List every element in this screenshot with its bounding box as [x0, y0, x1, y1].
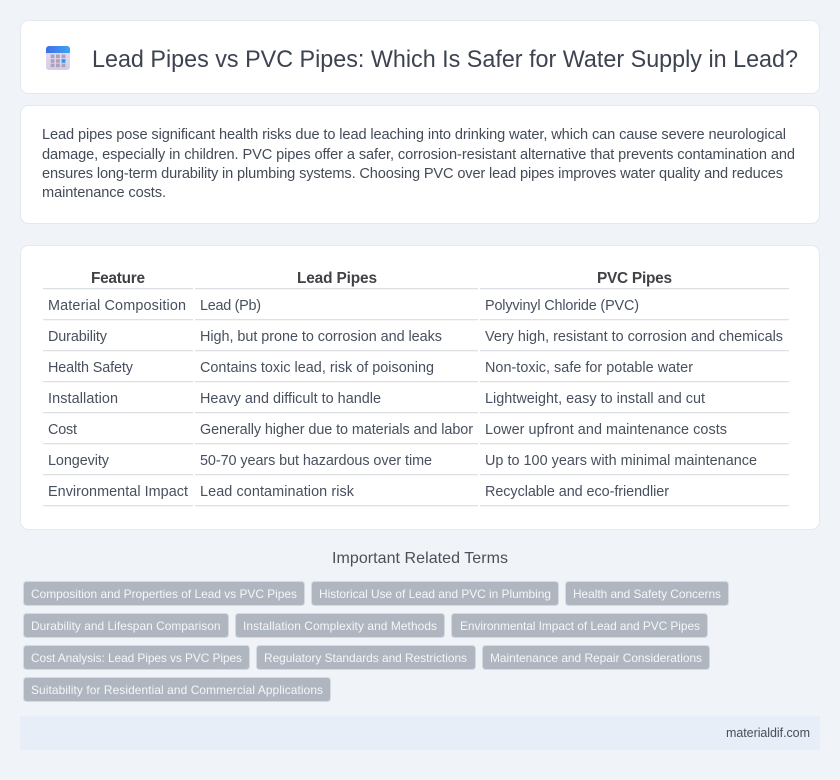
row: durability: Very high, resistant to corrosion and chemicals: [485, 329, 783, 345]
row: material composition: Lead (Pb): [200, 298, 261, 314]
tag: [24, 678, 330, 702]
row: cost: Lower upfront and maintenance costs: [485, 422, 727, 438]
row: cost: Generally higher due to materials and labor: [200, 422, 473, 438]
tag: Environmental Impact of Lead and PVC Pipes: [460, 619, 700, 633]
tag: Health and Safety Concerns: [573, 587, 721, 601]
tag: Regulatory Standards and Restrictions: [264, 651, 467, 665]
row: health safety: Non-toxic, safe for potable water: [485, 360, 693, 376]
header panel: [20, 20, 820, 94]
panel: introduction text: Lead pipes pose significant health risks due to lead leaching into drinking water, which can cause severe neurological: [42, 127, 786, 143]
tag: [312, 582, 558, 606]
row: material composition: [48, 298, 639, 314]
row: durability: Durability: [48, 329, 108, 345]
tag: Historical Use of Lead and PVC in Plumbing: [319, 587, 551, 601]
footer: [20, 716, 820, 750]
heading: important related terms: Important Related Terms: [332, 550, 508, 567]
tag: [452, 614, 708, 638]
tag: [482, 646, 710, 670]
tag: Maintenance and Repair Considerations: [490, 651, 702, 665]
row: health safety: Health Safety: [48, 360, 134, 376]
row: installation: [48, 391, 705, 407]
icon: calendar: [46, 46, 70, 70]
related terms tags: [24, 582, 728, 702]
tag: Installation Complexity and Methods: [243, 619, 437, 633]
table header: [91, 270, 672, 287]
row: health safety: [48, 360, 693, 376]
row: longevity: Up to 100 years with minimal maintenance: [485, 453, 757, 469]
tag: [24, 614, 228, 638]
tag: [24, 646, 250, 670]
tag: [566, 582, 728, 606]
row: material composition: Polyvinyl Chloride (PVC): [485, 298, 639, 314]
tag: [236, 614, 444, 638]
panel: introduction text: [20, 106, 820, 224]
row: longevity: Longevity: [48, 453, 110, 469]
row: longevity: [48, 453, 757, 469]
tag: Composition and Properties of Lead vs PVC Pipes: [31, 587, 297, 601]
row: durability: [48, 329, 783, 345]
row: cost: [48, 422, 727, 438]
row: installation: Lightweight, easy to install and cut: [485, 391, 705, 407]
panel: comparison table: [20, 246, 820, 530]
row: longevity: 50-70 years but hazardous over time: [200, 453, 432, 469]
row: environmental impact: Lead contamination risk: [200, 484, 355, 500]
tag: [256, 646, 476, 670]
row: material composition: Material Composition: [48, 298, 186, 314]
row: health safety: Contains toxic lead, risk of poisoning: [200, 360, 434, 376]
tag: [24, 582, 304, 606]
title: Lead Pipes vs PVC Pipes: Which Is Safer for Water Supply in Lead?: [92, 46, 798, 73]
table header: PVC Pipes: [597, 270, 672, 287]
row: environmental impact: Recyclable and eco-friendlier: [485, 484, 669, 500]
tag: Suitability for Residential and Commercial Applications: [31, 683, 323, 697]
row: environmental impact: [48, 484, 669, 500]
row: cost: Cost: [48, 422, 77, 438]
panel: introduction text: maintenance costs.: [42, 185, 166, 201]
tag: Durability and Lifespan Comparison: [31, 619, 220, 633]
row: environmental impact: Environmental Impact: [48, 484, 188, 500]
row: installation: Heavy and difficult to handle: [200, 391, 381, 407]
panel: introduction text: damage, especially in children. PVC pipes offer a safer, corrosion-resistant alternative that prevents contamination and: [42, 147, 795, 163]
row: durability: High, but prone to corrosion and leaks: [200, 329, 442, 345]
panel: introduction text: ensures long-term durability in plumbing systems. Choosing PVC over lead pipes improves water quality and reduces: [42, 166, 783, 182]
table header: Feature: [91, 270, 145, 287]
tag: Cost Analysis: Lead Pipes vs PVC Pipes: [31, 651, 242, 665]
table header: Lead Pipes: [297, 270, 377, 287]
row: installation: Installation: [48, 391, 118, 407]
footer: materialdif.com: [726, 726, 810, 740]
